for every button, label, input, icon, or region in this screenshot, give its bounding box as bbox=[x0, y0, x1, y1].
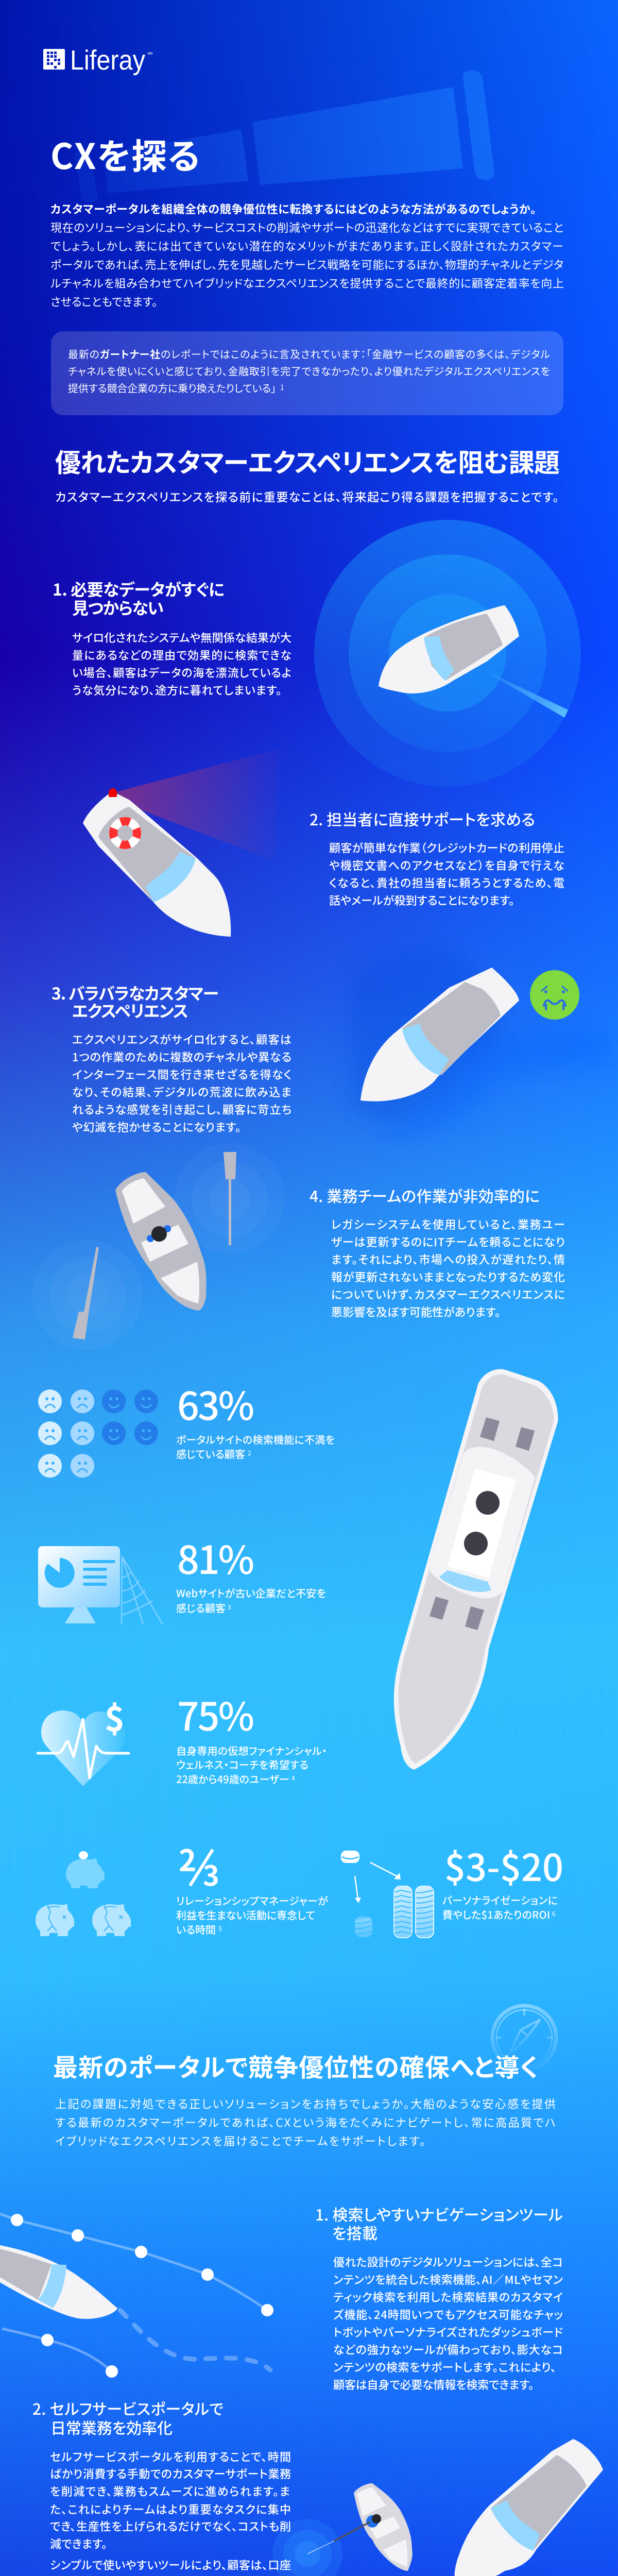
intro text: させることもできます。 bbox=[50, 293, 158, 310]
illustration: rowboat with oars and ripples bbox=[32, 1143, 285, 1350]
heading: 1. 必要なデータがすぐに bbox=[53, 577, 225, 601]
caption bbox=[176, 1432, 335, 1461]
text block: ンテンツの検索をサポートします。これにより、 bbox=[333, 2359, 556, 2375]
caption: Webサイトが古い企業だと不安を bbox=[176, 1585, 326, 1600]
caption bbox=[176, 1743, 327, 1786]
logo: Liferay: Liferay bbox=[70, 45, 145, 76]
caption: いる時間 bbox=[176, 1922, 216, 1937]
text block: portal intro: する最新のカスタマーポータルであれば、CXという海をたくみにナビゲートし、常に高品質でハ bbox=[55, 2114, 556, 2130]
caption: 5 bbox=[218, 1924, 222, 1933]
text block: なり、その結果、デジタルの荒波に飲み込ま bbox=[72, 1083, 291, 1100]
text block: についていけず、カスタマーエクスペリエンスに bbox=[331, 1286, 565, 1302]
text block: portal intro bbox=[55, 2095, 556, 2149]
heading bbox=[52, 981, 219, 1022]
text block: 量にあるなどの理由で効果的に検索できな bbox=[72, 647, 291, 663]
callout: Gartner quote: 1 bbox=[280, 382, 284, 393]
caption: 感じる顧客 bbox=[176, 1600, 226, 1615]
caption: ポータルサイトの検索機能に不満を bbox=[176, 1432, 335, 1447]
icon: seasick face bbox=[530, 970, 579, 1020]
illustration: boat with lifebuoy and red beam bbox=[83, 749, 280, 937]
text block: 報が更新されないままとなったりするため変化 bbox=[331, 1268, 565, 1285]
text block bbox=[333, 2253, 563, 2393]
text block: ンテンツを統合した検索機能、AI／MLやセマン bbox=[333, 2271, 563, 2287]
illustration: waves, boat and seasick face bbox=[350, 950, 613, 1139]
text block: た、これによりチームはより重要なタスクに集中 bbox=[50, 2501, 291, 2517]
text block: ズ機能、24時間いつでもアクセス可能なチャッ bbox=[333, 2306, 563, 2323]
text block bbox=[329, 839, 564, 908]
caption bbox=[176, 1893, 328, 1937]
callout: Gartner quote: 提供する競合企業の方に乗り換えたりしている」 bbox=[68, 380, 276, 395]
icon: heart with pulse and dollar: $ bbox=[105, 1692, 125, 1741]
caption: パーソナライゼーションに bbox=[442, 1892, 558, 1907]
stat: 81% bbox=[38, 1529, 326, 1624]
text block bbox=[72, 629, 291, 698]
text block: セルフサービスポータルを利用することで、時間 bbox=[50, 2448, 291, 2465]
heading bbox=[315, 2202, 563, 2244]
subheading: challenges: カスタマーエクスペリエンスを探る前に重要なことは、将来起こり得る課題を把握することです。 bbox=[55, 487, 559, 505]
caption: 3 bbox=[228, 1603, 231, 1612]
text block: シンプルで使いやすいツールにより、顧客は、口座 bbox=[50, 2556, 291, 2573]
text block: や機密文書へのアクセスなど）を自身で行えな bbox=[329, 857, 564, 873]
text block: portal intro: イブリッドなエクスペリエンスを届けることでチームをサポートします。 bbox=[55, 2132, 425, 2149]
caption: 自身専用の仮想ファイナンシャル・ bbox=[176, 1743, 327, 1758]
callout: Gartner quote bbox=[51, 331, 563, 415]
heading: 2. 担当者に直接サポートを求める bbox=[310, 807, 535, 830]
text block: くなると、貴社の担当者に頼ろうとするため、電 bbox=[329, 874, 564, 891]
text block: 顧客が簡単な作業（クレジットカードの利用停止 bbox=[329, 839, 564, 856]
icon: piggy banks bbox=[36, 1851, 131, 1936]
panel: challenge 4 bbox=[32, 1143, 565, 1350]
text block: 顧客は自身で必要な情報を検索できます。 bbox=[333, 2376, 534, 2393]
illustration: kayak, paddle, ripples and boat bbox=[272, 2439, 603, 2576]
panel: challenge 1 bbox=[53, 520, 581, 787]
heading: challenges: 優れたカスタマーエクスペリエンスを阻む課題 bbox=[55, 443, 560, 480]
stat: ROI bbox=[341, 1838, 563, 1938]
text block: い場合、顧客はデータの海を漂流しているよ bbox=[72, 664, 291, 681]
caption: 2 bbox=[248, 1449, 251, 1458]
icon: telescope backdrop bbox=[75, 70, 494, 203]
panel: hero bbox=[43, 45, 564, 415]
stat: 63% bbox=[38, 1375, 335, 1478]
number bbox=[179, 1837, 219, 1894]
panel: challenge 2 bbox=[83, 749, 564, 937]
callout: Gartner quote: チャネルを使いにくいと感じており、金融取引を完了できなかったり、より優れたデジタルエクスペリエンスを bbox=[68, 363, 550, 378]
text block: うな気分になり、途方に暮れてしまいます。 bbox=[72, 682, 282, 698]
icon: cobwebbed monitor bbox=[38, 1546, 163, 1624]
intro text: ポータルであれば、売上を伸ばし、先を見越したサービス戦略を可能にするほか、物理的チャネルとデジタ bbox=[50, 256, 563, 273]
text block bbox=[331, 1216, 565, 1320]
illustration: island, spyglass and beam bbox=[55, 2568, 464, 2576]
text block: portal intro: 上記の課題に対処できる正しいソリューションをお持ちでしょうか。大船のような安心感を提供 bbox=[55, 2095, 556, 2112]
text block: を削減でき、業務もスムーズに進められます。ま bbox=[50, 2483, 290, 2499]
text block: ばかり消費する手動でのカスタマーサポート業務 bbox=[50, 2465, 291, 2482]
caption: 22歳から49歳のユーザー bbox=[176, 1771, 289, 1786]
caption: 利益を生まない活動に専念して bbox=[176, 1907, 315, 1922]
number: 81% bbox=[177, 1529, 254, 1585]
icon: heart with pulse and dollar bbox=[38, 1692, 129, 1786]
panel: solution 2 bbox=[32, 2397, 603, 2576]
text block: ます。それにより、市場への投入が遅れたり、情 bbox=[331, 1251, 565, 1267]
panel: solution 3 bbox=[55, 2568, 563, 2576]
number: 3 bbox=[203, 1853, 219, 1894]
number: $3-$20 bbox=[444, 1838, 563, 1892]
text block bbox=[72, 1031, 291, 1135]
stat: 75% bbox=[38, 1686, 327, 1786]
text block: などの強力なツールが備わっており、膨大なコ bbox=[333, 2341, 563, 2358]
illustration: large boat in stats section bbox=[394, 1369, 558, 1770]
text block: 悪影響を及ぼす可能性があります。 bbox=[331, 1303, 501, 1320]
heading: 4. 業務チームの作業が非効率的に bbox=[310, 1184, 540, 1207]
text block: 1つの作業のために複数のチャネルや異なる bbox=[72, 1048, 291, 1065]
icon: face grid bbox=[38, 1389, 158, 1478]
panel: challenge 3 bbox=[52, 950, 613, 1139]
heading: 見つからない bbox=[72, 596, 164, 619]
logo: Liferay: ® bbox=[147, 50, 153, 59]
number: 63% bbox=[177, 1375, 254, 1431]
heading: 3. バラバラなカスタマー bbox=[52, 981, 219, 1005]
illustration: route dots and boat bbox=[0, 2214, 273, 2378]
heading: を搭載 bbox=[332, 2221, 377, 2244]
illustration: radar circles and boat bbox=[314, 520, 581, 787]
number: 75% bbox=[177, 1686, 254, 1742]
text block: れるような感覚を引き起こし、顧客に苛立ち bbox=[72, 1101, 291, 1117]
intro text: カスタマーポータルを組織全体の競争優位性に転換するにはどのような方法があるのでしょうか。 bbox=[50, 200, 536, 217]
intro text: 現在のソリューションにより、サービスコストの削減やサポートの迅速化などはすでに実現できていること bbox=[50, 219, 563, 235]
intro text: でしょう。しかし、表には出てきていない潜在的なメリットがまだあります。正しく設計されたカスタマー bbox=[50, 238, 563, 254]
text block: ザーは更新するのにITチームを頼ることになり bbox=[331, 1233, 565, 1250]
caption: 6 bbox=[552, 1909, 556, 1918]
caption: 4 bbox=[291, 1774, 295, 1783]
caption: 感じている顧客 bbox=[176, 1446, 245, 1461]
heading: portal: 最新のポータルで競争優位性の確保へと導く bbox=[53, 2047, 538, 2083]
heading: 1. 検索しやすいナビゲーションツール bbox=[315, 2202, 563, 2225]
text block: エクスペリエンスがサイロ化すると、顧客は bbox=[72, 1031, 291, 1047]
stat: two thirds bbox=[36, 1837, 328, 1937]
text block: インターフェース間を行き来せざるを得なく bbox=[72, 1066, 291, 1082]
heading: 日常業務を効率化 bbox=[50, 2416, 173, 2438]
text block: レガシーシステムを使用していると、業務ユー bbox=[331, 1216, 565, 1232]
text block: 減できます。 bbox=[50, 2535, 107, 2552]
text block: サイロ化されたシステムや無関係な結果が大 bbox=[72, 629, 291, 646]
caption bbox=[442, 1892, 558, 1922]
intro text: ルチャネルを組み合わせてハイブリッドなエクスペリエンスを提供することで最終的に顧客定着率を向上 bbox=[50, 275, 564, 291]
title: CXを探る bbox=[50, 128, 200, 179]
callout: Gartner quote: 最新のガートナー社のレポートではこのように言及されています：「金融サービスの顧客の多くは、デジタル bbox=[68, 346, 550, 361]
text block: トボットやパーソナライズされたダッシュボード bbox=[333, 2324, 563, 2340]
heading: エクスペリエンス bbox=[72, 998, 188, 1022]
intro text bbox=[50, 200, 564, 310]
number: 2 bbox=[179, 1837, 196, 1880]
text block: ティック検索を利用した検索結果のカスタマイ bbox=[333, 2289, 563, 2305]
icon: compass bbox=[492, 2006, 556, 2070]
text block: でき、生産性を上げられるだけでなく、コストも削 bbox=[50, 2518, 291, 2534]
text block: 優れた設計のデジタルソリューションには、全コ bbox=[333, 2253, 563, 2270]
panel: solution 1 bbox=[0, 2202, 563, 2393]
caption: 費やした$1あたりのROI bbox=[442, 1907, 550, 1922]
caption: ウェルネス・コーチを希望する bbox=[176, 1757, 308, 1772]
caption bbox=[176, 1585, 326, 1615]
heading bbox=[32, 2397, 224, 2438]
text block: や幻滅を抱かせることになります。 bbox=[72, 1118, 241, 1135]
heading: 2. セルフサービスポータルで bbox=[32, 2397, 224, 2419]
text block: 話やメールが殺到することになります。 bbox=[329, 892, 514, 908]
heading bbox=[53, 577, 225, 619]
icon: coins and arrows bbox=[341, 1851, 434, 1938]
text block bbox=[50, 2448, 291, 2576]
caption: リレーションシップマネージャーが bbox=[176, 1893, 328, 1908]
